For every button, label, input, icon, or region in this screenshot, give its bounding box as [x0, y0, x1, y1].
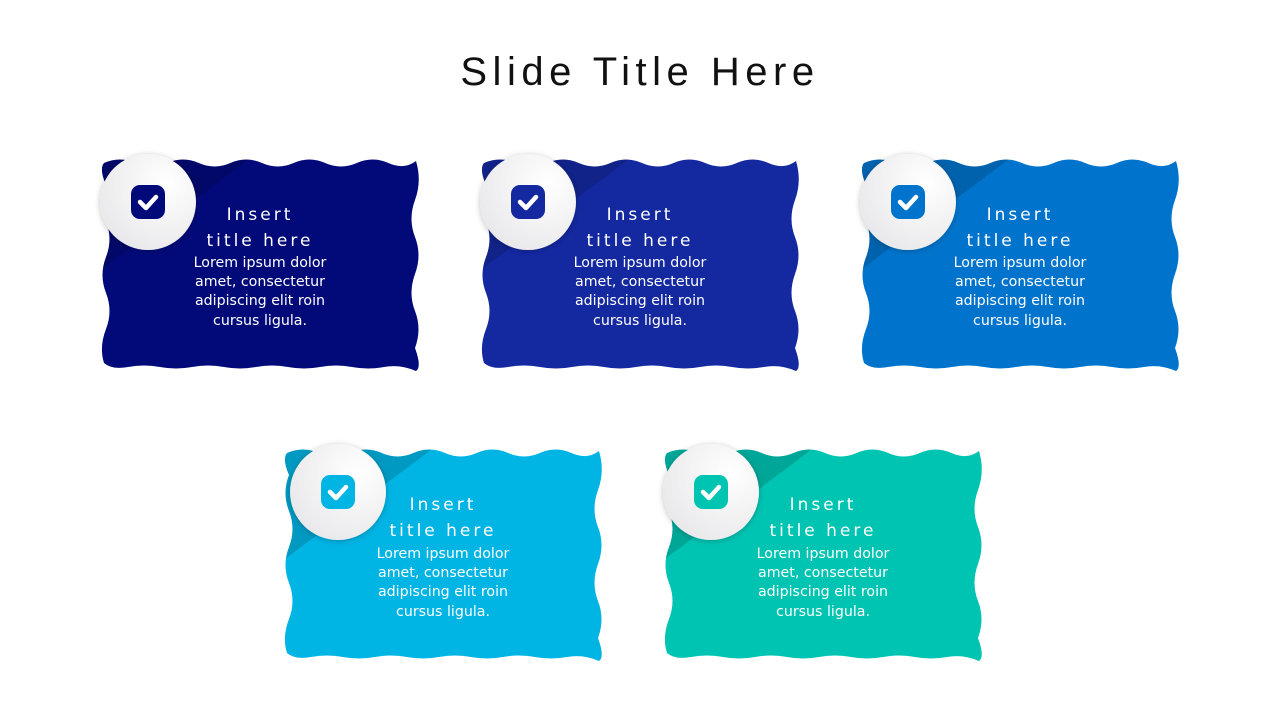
text block 4: Lorem ipsum dolor	[377, 546, 510, 562]
text block 5: amet, consectetur	[758, 565, 888, 581]
text block 4	[377, 495, 510, 620]
text block 4: adipiscing elit roin	[378, 584, 508, 600]
text block 5: Lorem ipsum dolor	[757, 546, 890, 562]
text block 1: adipiscing elit roin	[195, 293, 325, 309]
icon: check circle 3	[860, 154, 956, 250]
text block 3: Lorem ipsum dolor	[954, 255, 1087, 271]
text block 1: amet, consectetur	[195, 274, 325, 290]
text block 5: Insert	[790, 495, 856, 515]
text block 5: adipiscing elit roin	[758, 584, 888, 600]
text block 1: cursus ligula.	[213, 313, 307, 329]
text block 1: Insert	[227, 205, 293, 225]
text block 2: title here	[587, 231, 693, 251]
text block 3	[954, 205, 1087, 329]
text block 2	[574, 205, 707, 329]
text block 4: title here	[390, 521, 496, 541]
text block 2: Insert	[607, 205, 673, 225]
text block 5: title here	[770, 521, 876, 541]
text block 3: title here	[967, 231, 1073, 251]
text block 2: cursus ligula.	[593, 313, 687, 329]
text block 5: cursus ligula.	[776, 604, 870, 620]
icon: check circle 2	[480, 154, 576, 250]
text block 2: Lorem ipsum dolor	[574, 255, 707, 271]
text block 4: cursus ligula.	[396, 604, 490, 620]
panel: card 1	[100, 154, 419, 371]
icon: check circle 4	[290, 444, 386, 540]
panel: card 4	[285, 444, 602, 661]
icon: check circle 5	[663, 444, 759, 540]
text block 1: title here	[207, 231, 313, 251]
text block 3: cursus ligula.	[973, 313, 1067, 329]
text block 4: amet, consectetur	[378, 565, 508, 581]
text block 3: adipiscing elit roin	[955, 293, 1085, 309]
icon: check circle 1	[100, 154, 196, 250]
panel: card 2	[480, 154, 799, 371]
text block 1: Lorem ipsum dolor	[194, 255, 327, 271]
text block 3: amet, consectetur	[955, 274, 1085, 290]
text block 3: Insert	[987, 205, 1053, 225]
text block 2: adipiscing elit roin	[575, 293, 705, 309]
text block 1	[194, 205, 327, 329]
title: Slide Title Here	[460, 50, 820, 94]
text block 2: amet, consectetur	[575, 274, 705, 290]
panel: card 3	[860, 154, 1179, 371]
text block 5	[757, 495, 890, 620]
text block 4: Insert	[410, 495, 476, 515]
panel: card 5	[663, 444, 982, 661]
